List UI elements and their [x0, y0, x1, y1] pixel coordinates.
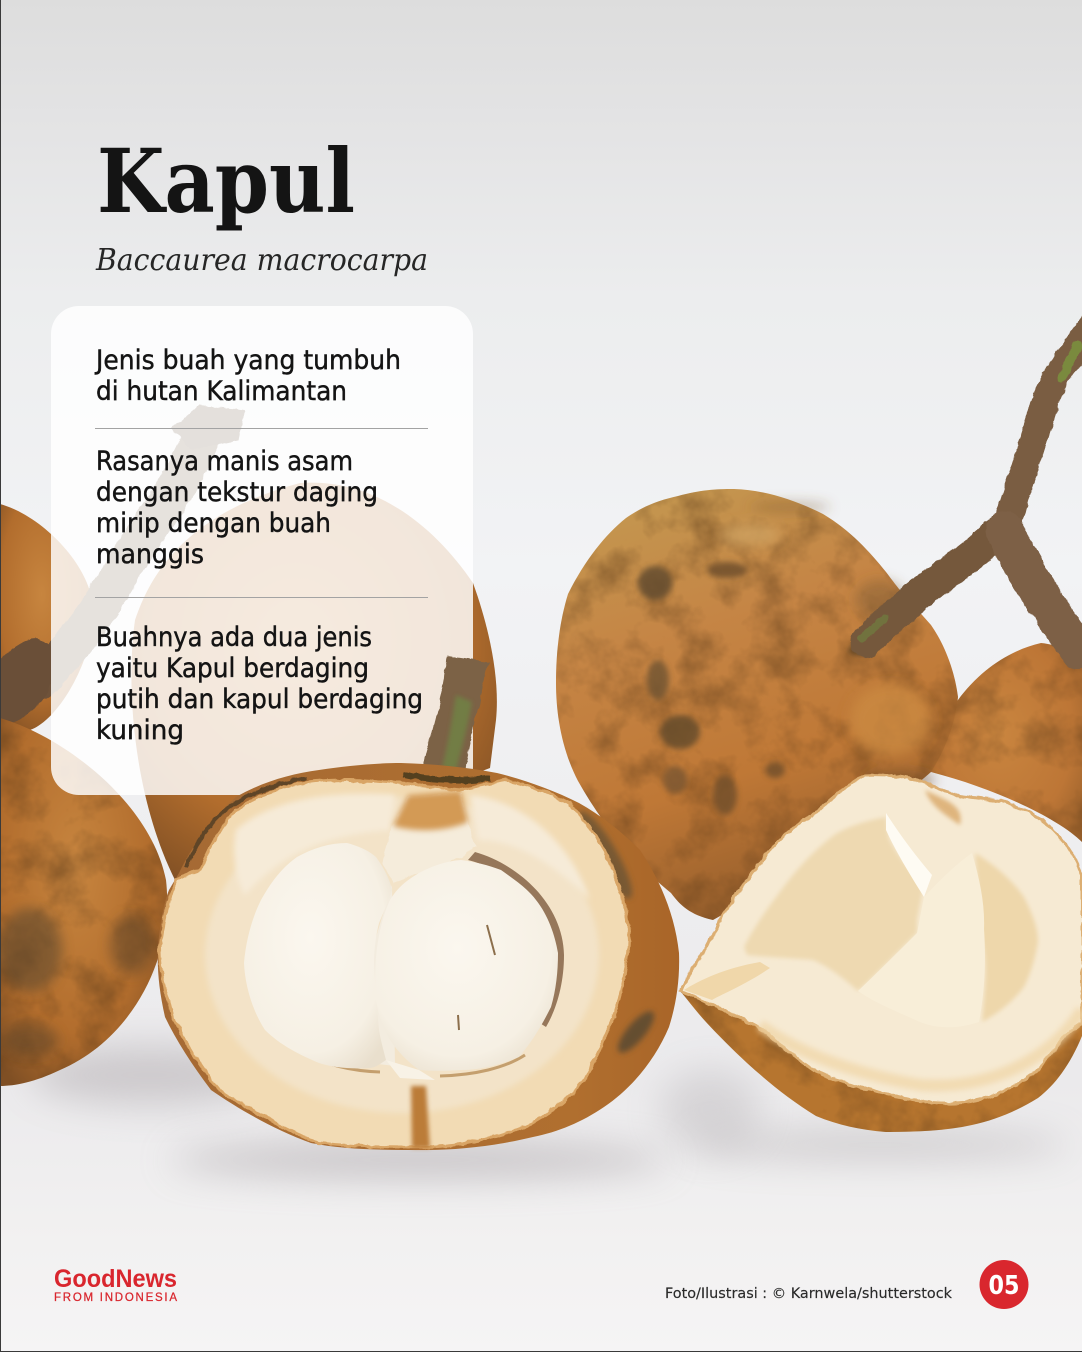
photo: ground shadows: [30, 1045, 1070, 1178]
pale upper flesh: [234, 794, 590, 900]
warm rim tint on open half: [760, 1010, 1082, 1086]
stem: [420, 656, 489, 778]
logo: GoodNews from Indonesia: [54, 1265, 177, 1304]
branch with fork: [862, 322, 1082, 650]
seed backing: [372, 885, 395, 1066]
top core: [383, 793, 476, 883]
bottom core groove: [411, 1086, 430, 1148]
seed shell edge: [258, 852, 564, 1076]
fruit: big back right: [556, 489, 958, 920]
branch behind panel: [40, 405, 245, 680]
fact 2: dengan tekstur daging: [96, 477, 378, 508]
fruit: upper left: [0, 504, 93, 730]
seed base fibres: [386, 1060, 435, 1080]
flesh: [160, 780, 629, 1147]
seed: right: [375, 860, 558, 1071]
dark skin patches: [570, 806, 660, 1058]
fact 1: di hutan Kalimantan: [96, 376, 347, 407]
orange rim patch: [925, 790, 961, 825]
logo: GoodNews from Indonesia: FROM INDONESIA: [54, 1292, 177, 1304]
logo: GoodNews from Indonesia: GoodNews: [54, 1265, 177, 1293]
fruit: large back fruit: [131, 483, 497, 880]
info panel: [51, 306, 473, 795]
seed: left: [244, 843, 392, 1068]
title: Kapul: [97, 129, 355, 233]
fact 2: manggis: [96, 539, 204, 570]
dark cracked rim: [186, 778, 306, 867]
skin: [158, 763, 679, 1150]
stem shadow on fruit: [848, 644, 876, 656]
page number badge: 05: [988, 1271, 1020, 1301]
flesh of open half: [680, 775, 1082, 1103]
subtitle: Baccaurea macrocarpa: [95, 243, 428, 278]
fact 2: Rasanya manis asam: [96, 446, 353, 477]
photo: open fruit half at right: [680, 775, 1082, 1132]
fact 3: putih dan kapul berdaging: [96, 684, 423, 715]
inner flesh ring: [205, 797, 599, 1113]
fact 1: Jenis buah yang tumbuh: [94, 345, 401, 376]
photo credit: Foto/Ilustrasi : © Karnwela/shutterstock: [665, 1286, 953, 1302]
panel text: [94, 345, 423, 746]
white torn edge: [886, 813, 932, 897]
photo: cut fruit in the centre: [158, 656, 679, 1150]
fact 3: Buahnya ada dua jenis: [96, 622, 372, 653]
fact 3: yaitu Kapul berdaging: [96, 653, 369, 684]
fruit: lower left: [0, 718, 167, 1086]
cavity of open half: left: [744, 817, 924, 991]
fruit: far right: [931, 643, 1082, 842]
fact 3: kuning: [96, 715, 184, 746]
inner membrane fold: [858, 853, 985, 1027]
photo: fruits behind the panel: [0, 405, 497, 1086]
cavity of open half: right: [975, 853, 1038, 1022]
photo: big fruit and branch at right: [556, 322, 1082, 920]
page number badge: [980, 1260, 1028, 1309]
fact 2: mirip dengan buah: [96, 508, 331, 539]
stem knob at left: [0, 639, 53, 723]
skin of open half: [680, 991, 1082, 1132]
left lip of open half: [684, 962, 770, 1000]
